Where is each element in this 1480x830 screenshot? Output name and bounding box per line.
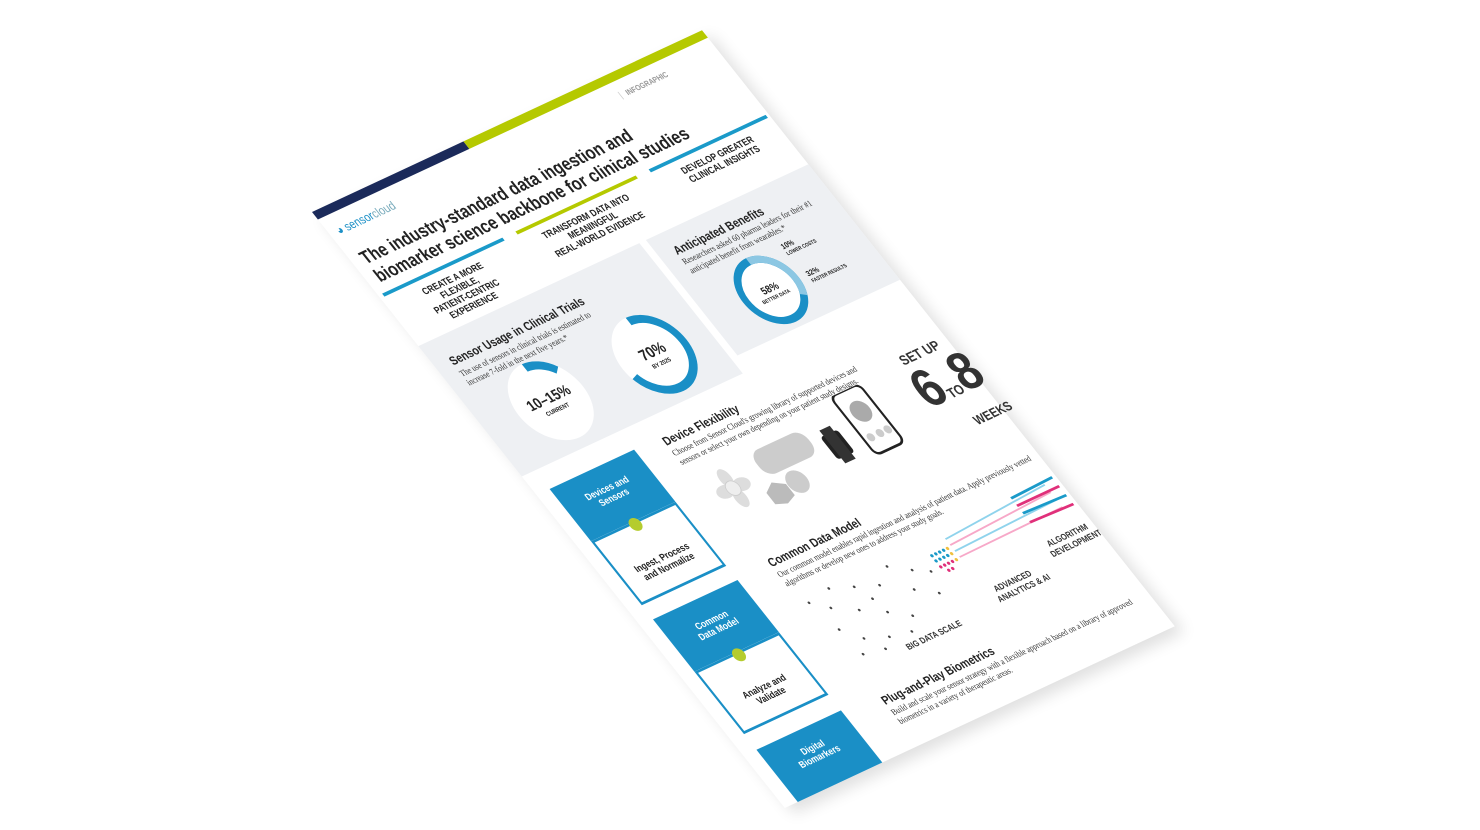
block: devices and sensors: Devices and [583, 475, 632, 503]
device flexibility: Device Flexibility [659, 402, 742, 448]
panel: anticipated benefits [646, 164, 900, 356]
chart: data scale graphic [808, 476, 1105, 656]
text: Researchers asked 60 pharma leaders for their #1 anticipated benefit from wearables.* [680, 199, 815, 276]
block: common data model: Data Model [696, 616, 742, 643]
block: ingest [591, 502, 726, 605]
heading: Anticipated Benefits [670, 204, 767, 257]
plug-and-play biometrics: Build and scale your sensor strategy with a flexible approach based on a library of approved biometrics in a variety of therapeutic areas. [889, 598, 1135, 727]
donut 10-15%: CURRENT [545, 402, 572, 418]
infographic label: INFOGRAPHIC [623, 70, 670, 97]
block: digital biomarkers [756, 710, 882, 802]
donut benefits: LOWER COSTS [785, 238, 819, 257]
block: analyze: Validate [754, 685, 789, 707]
green dot [729, 646, 749, 663]
heading: transform data: TRANSFORM DATA INTO [540, 193, 632, 241]
icon: devices [716, 384, 904, 507]
common data model section [764, 454, 1105, 656]
plug-and-play biometrics: Plug-and-Play Biometrics [878, 644, 998, 707]
donut benefits: FASTER RESULTS [810, 263, 849, 284]
heading: insights: CLINICAL INSIGHTS [687, 144, 763, 185]
heading: transform data: REAL-WORLD EVIDENCE [553, 210, 648, 260]
donut 10-15%: 10–15% [523, 382, 575, 415]
donut benefits: 32% [803, 265, 822, 278]
donut 70% [612, 314, 698, 394]
chart: data scale graphic: DEVELOPMENT [1048, 527, 1105, 559]
heading: transform data [515, 176, 648, 260]
block: common data model: Common [693, 609, 731, 632]
heading: insights [648, 114, 768, 185]
document page [312, 30, 1175, 808]
heading: patient-centric: CREATE A MORE [420, 261, 486, 297]
flowchart [550, 450, 882, 802]
heading: insights: DEVELOP GREATER [679, 135, 756, 176]
block: analyze [694, 632, 829, 734]
common data model section: Common Data Model [764, 515, 864, 569]
setup 6 to 8 weeks: 6TO8 [897, 340, 997, 419]
block: digital biomarkers: Biomarkers [797, 743, 843, 771]
block: digital biomarkers: Digital [798, 738, 827, 758]
device flexibility: Choose from Sensor Cloud's growing library of supported devices and sensors or select your own depending on your patient study designs. [670, 365, 861, 467]
heading: patient-centric: EXPERIENCE [448, 291, 501, 321]
chart: data scale graphic: ADVANCED [991, 568, 1034, 594]
chart: data scale graphic: BIG DATA SCALE [903, 618, 965, 652]
heading: patient-centric: FLEXIBLE, [438, 275, 482, 301]
donut 70%: BY 2025 [651, 357, 674, 371]
common data model section: Our common model enables rapid ingestion and analysis of patient data. Apply previously vetted algorithms or develop new ones to address your study goals. [775, 454, 1034, 589]
column headings [382, 114, 768, 321]
logo: ◕ sensorcloud [332, 198, 399, 237]
setup 6 to 8 weeks: WEEKS [970, 399, 1016, 428]
donut 70%: 70% [635, 339, 671, 365]
block: devices and sensors [550, 450, 675, 541]
block: ingest: and Normalize [641, 551, 697, 583]
donut 10-15% [508, 361, 594, 440]
device flexibility [659, 365, 904, 507]
chart: data scale graphic: ALGORITHM [1044, 521, 1090, 549]
chart: data scale graphic: ANALYTICS & AI [995, 572, 1053, 604]
title: biomarker science backbone for clinical studies [370, 124, 694, 286]
setup 6 to 8 weeks: SET UP [896, 338, 944, 369]
header bar [312, 30, 708, 220]
title: The industry-standard data ingestion and [355, 126, 637, 268]
donut benefits [734, 238, 849, 324]
block: analyze: Analyze and [740, 673, 789, 701]
donut benefits: BETTER DATA [761, 288, 793, 306]
heading: Sensor Usage in Clinical Trials [446, 294, 588, 368]
heading: patient-centric [382, 238, 505, 321]
donut benefits: 10% [778, 238, 797, 251]
green dot [626, 516, 645, 533]
text: The use of sensors in clinical trials is estimated to increase 7-fold in the next five years.* [458, 310, 593, 388]
donut benefits: 58% [759, 281, 782, 298]
block: devices and sensors: Sensors [597, 487, 632, 509]
block: ingest: Ingest, Process [632, 541, 692, 575]
panel: sensor usage [418, 243, 743, 476]
block: common data model [653, 580, 779, 672]
heading: transform data: MEANINGFUL [566, 210, 621, 241]
heading: patient-centric: PATIENT-CENTRIC [432, 278, 502, 316]
